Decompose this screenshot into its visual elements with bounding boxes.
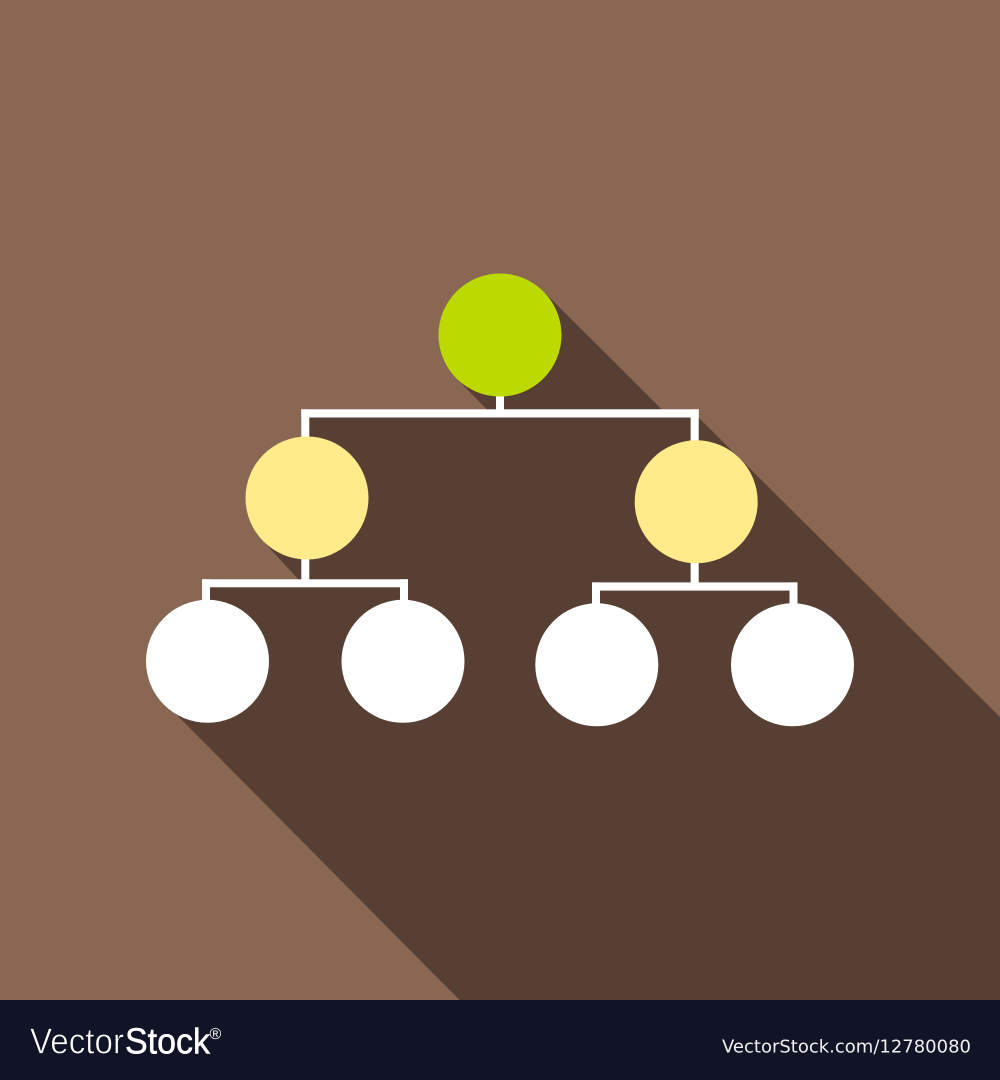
org chart hierarchy <box>146 274 854 726</box>
leaf node: white circle 2 <box>342 600 464 723</box>
second level node: left yellow circle <box>246 436 368 560</box>
connector lines: left branch <box>202 552 408 606</box>
leaf node: white circle 1 <box>146 600 269 723</box>
root node: green circle <box>438 274 562 396</box>
footer logo: VectorStock <box>30 1020 222 1062</box>
footer bar <box>0 1000 1000 1080</box>
connector lines: right branch <box>592 556 798 609</box>
footer image id text: VectorStock.com/12780080 <box>722 1036 971 1058</box>
long flat shadow <box>170 292 1000 1000</box>
footer logo: VectorStock: ® <box>210 1026 222 1043</box>
connector lines: top level <box>301 390 699 447</box>
second level node: right yellow circle <box>635 440 758 563</box>
leaf node: white circle 4 <box>731 603 854 726</box>
footer logo: VectorStock: Stock <box>125 1020 211 1062</box>
leaf node: white circle 3 <box>535 603 658 726</box>
footer logo: VectorStock: Vector <box>30 1020 124 1062</box>
